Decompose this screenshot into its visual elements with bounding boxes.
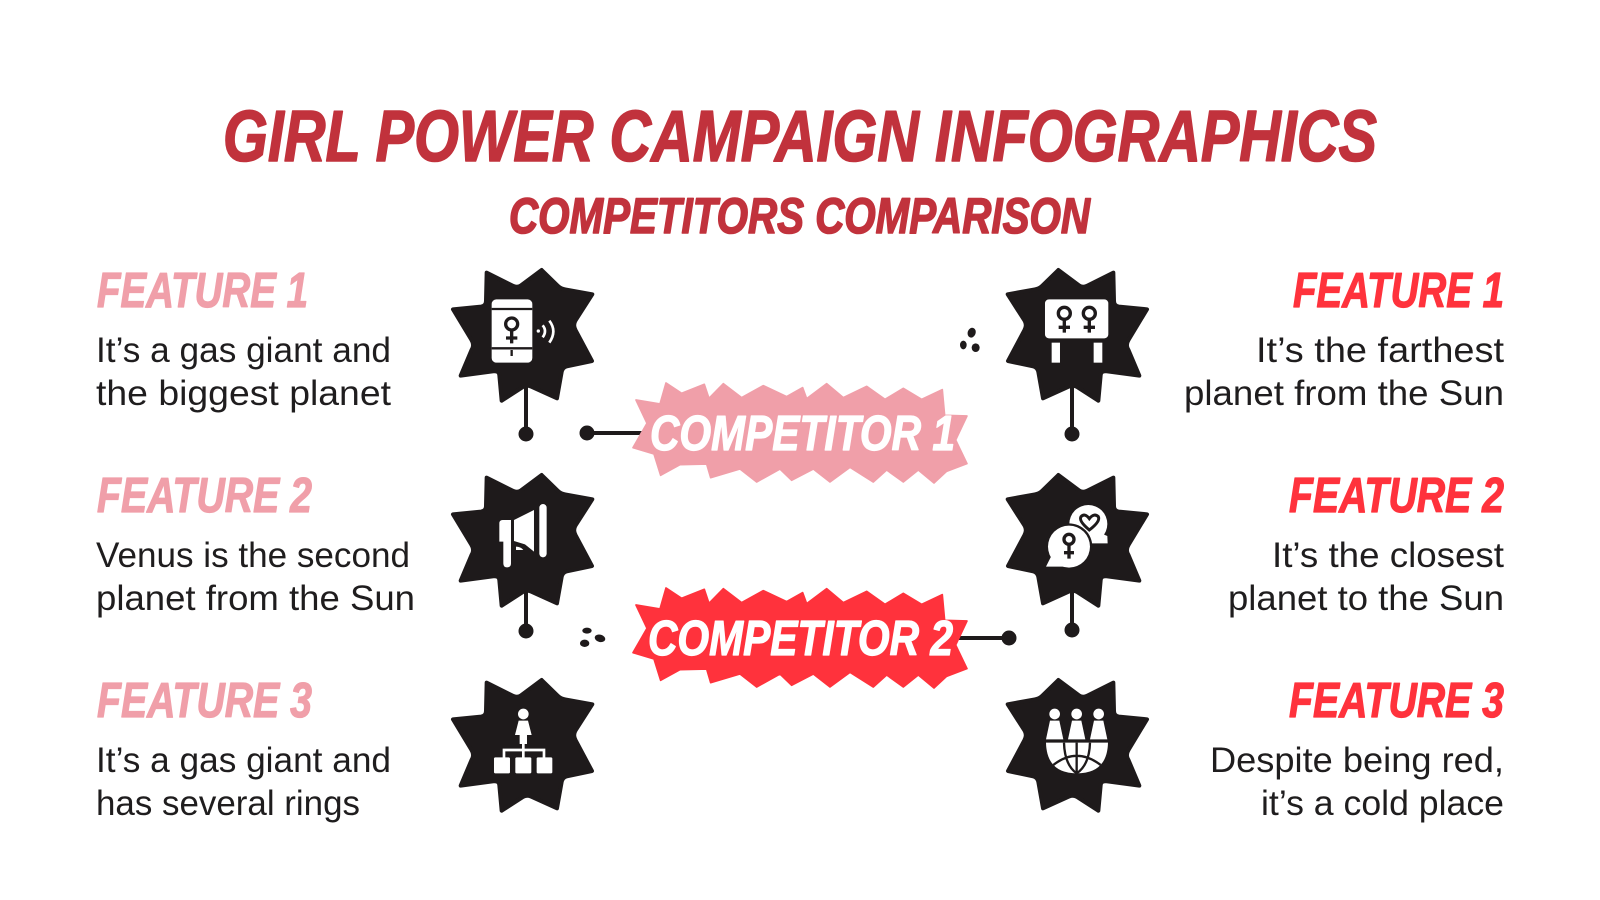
description: It’s a gas giant and bbox=[96, 741, 391, 780]
icon: megaphone bbox=[453, 475, 592, 606]
description: it’s a cold place bbox=[1261, 784, 1504, 823]
description: has several rings bbox=[96, 784, 360, 823]
description bbox=[1228, 536, 1504, 618]
description bbox=[96, 536, 415, 618]
heading: FEATURE 3 bbox=[97, 674, 312, 728]
left text: feature 2 bbox=[96, 469, 415, 618]
description bbox=[96, 741, 391, 823]
description: Venus is the second bbox=[96, 536, 410, 575]
connector: right stem 1 bbox=[1065, 385, 1079, 441]
heading: FEATURE 1 bbox=[97, 264, 308, 318]
description: planet from the Sun bbox=[96, 579, 415, 618]
description bbox=[96, 331, 391, 413]
icon: phone with venus symbol bbox=[453, 270, 592, 401]
description: Despite being red, bbox=[1210, 741, 1504, 780]
description: It’s the closest bbox=[1272, 536, 1504, 575]
speck dots upper right bbox=[960, 327, 980, 352]
connector: competitor 2 line bbox=[955, 631, 1016, 645]
connector: left stem 1 bbox=[519, 385, 533, 441]
subtitle: COMPETITORS COMPARISON bbox=[509, 188, 1091, 244]
heading: FEATURE 2 bbox=[97, 469, 312, 523]
description: planet to the Sun bbox=[1228, 579, 1504, 618]
right text: feature 2 bbox=[1228, 469, 1504, 618]
description: the biggest planet bbox=[96, 374, 391, 413]
right text: feature 1 bbox=[1184, 264, 1504, 413]
connector: right stem 2 bbox=[1065, 590, 1079, 637]
connector: left stem 2 bbox=[519, 590, 533, 638]
heading: FEATURE 2 bbox=[1289, 469, 1504, 523]
description bbox=[1210, 741, 1504, 823]
description: It’s the farthest bbox=[1256, 331, 1504, 370]
left text: feature 1 bbox=[96, 264, 391, 413]
description: planet from the Sun bbox=[1184, 374, 1504, 413]
icon: women on globe bbox=[1008, 680, 1147, 811]
description bbox=[1184, 331, 1504, 413]
banner label: COMPETITOR 1 bbox=[650, 407, 955, 461]
description: It’s a gas giant and bbox=[96, 331, 391, 370]
heading: FEATURE 1 bbox=[1293, 264, 1504, 318]
left text: feature 3 bbox=[96, 674, 391, 823]
icon: org chart with woman bbox=[453, 680, 592, 811]
icon: speech bubbles bbox=[1008, 475, 1147, 606]
banner: competitor 1 bbox=[633, 383, 967, 483]
right text: feature 3 bbox=[1210, 674, 1504, 823]
banner label: COMPETITOR 2 bbox=[648, 612, 953, 666]
heading: FEATURE 3 bbox=[1289, 674, 1504, 728]
icon: signboard with venus symbols bbox=[1008, 270, 1147, 401]
connector: competitor 1 line bbox=[580, 426, 645, 440]
speck dots lower left bbox=[580, 628, 606, 647]
banner: competitor 2 bbox=[633, 588, 967, 688]
